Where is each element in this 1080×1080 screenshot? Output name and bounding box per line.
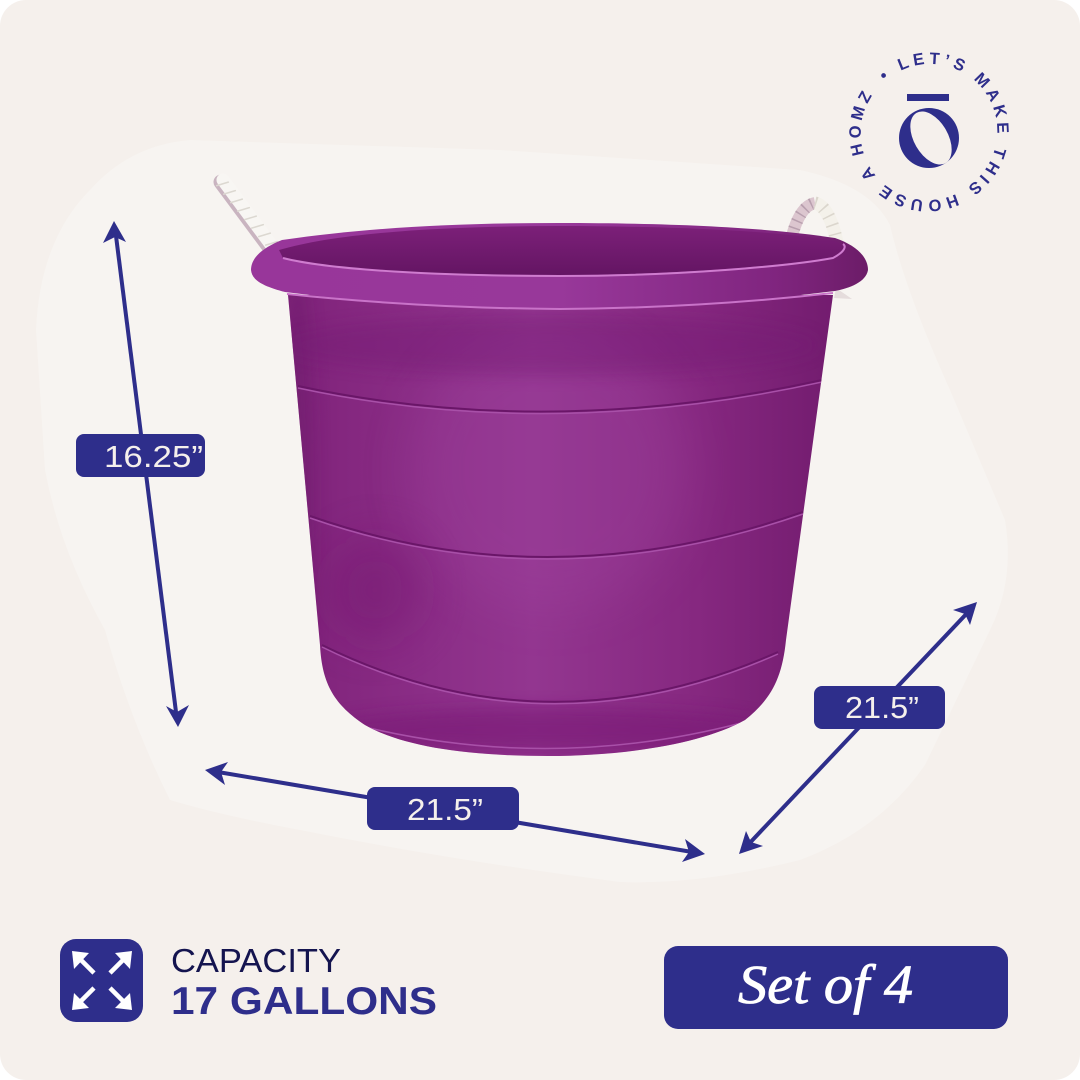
width label [367, 787, 519, 830]
width dimension arrow [205, 762, 705, 862]
set of 4 badge: Set of 4 [738, 954, 913, 1015]
left rope handle [217, 180, 278, 256]
height label [76, 434, 205, 477]
body shading [280, 270, 822, 752]
capacity value: 17 GALLONS [171, 980, 437, 1023]
capacity block [60, 939, 437, 1023]
right rope handle [792, 203, 852, 299]
tub rim [251, 223, 868, 308]
depth dimension arrow [739, 602, 977, 854]
product: purple tub with rope handles [217, 180, 868, 756]
width label: 21.5” [407, 792, 483, 827]
height dimension arrow [76, 221, 205, 727]
capacity label: CAPACITY [171, 942, 341, 979]
circular slogan: • LET’S MAKE THIS HOUSE A HOMZ [849, 52, 1009, 212]
depth label: 21.5” [845, 690, 919, 725]
set of 4 badge [664, 946, 1008, 1029]
light backdrop behind product [36, 140, 1008, 882]
height label: 16.25” [104, 439, 203, 474]
logo mark bar [907, 94, 949, 101]
tub opening [279, 226, 843, 275]
logo mark ring [899, 104, 960, 172]
icon: expand arrows [60, 939, 143, 1022]
tub body [288, 295, 833, 756]
logo badge [849, 52, 1009, 212]
depth label [814, 686, 945, 729]
rim highlight [283, 244, 845, 276]
